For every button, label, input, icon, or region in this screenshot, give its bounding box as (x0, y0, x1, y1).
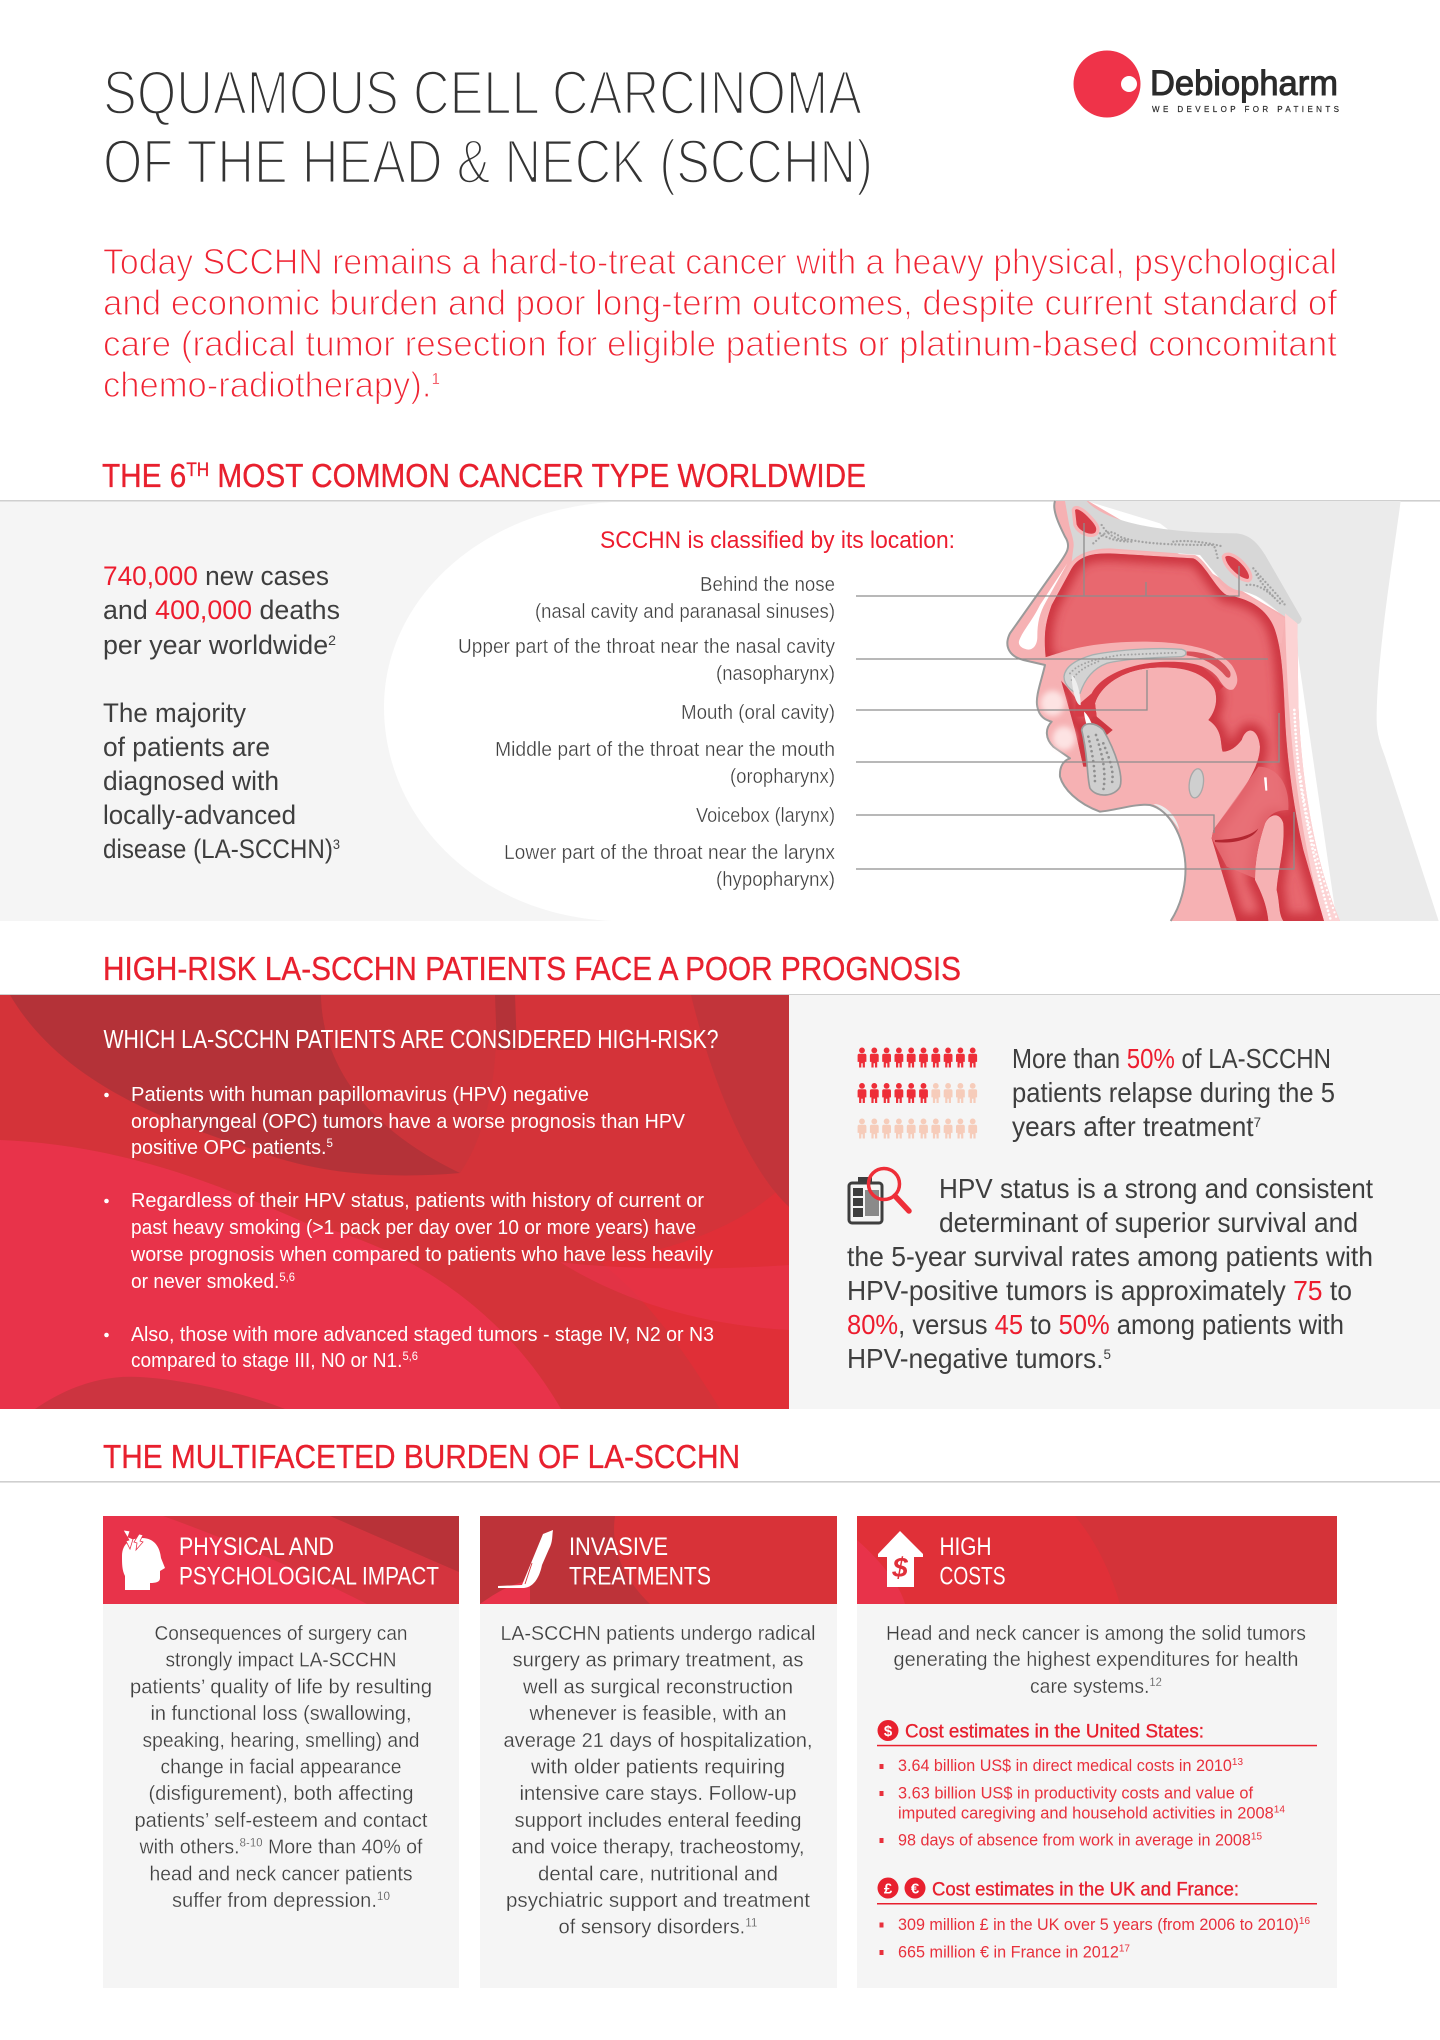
list: UK and France costs: 309 million £ in the UK over 5 years (from 2006 to 2010) (898, 1915, 1320, 1934)
bone dots (1093, 525, 1285, 605)
icon: house with dollar: $ (891, 1552, 908, 1583)
text: HPV status: the 5-year survival rates among patients with (847, 1241, 1373, 1272)
list: US costs: 15 (1251, 1830, 1262, 1842)
text: relapse: 7 (1254, 1114, 1261, 1130)
body text: patients’ self-esteem and contact (134, 1809, 428, 1832)
header text (569, 1533, 711, 1590)
palate (1030, 642, 1237, 703)
bullet: HPV negative: 5 (327, 1136, 333, 1150)
intro text: care (radical tumor resection for eligible patients or platinum-based concomitant (103, 323, 1337, 364)
larynx (1212, 767, 1288, 878)
text: HPV status: HPV-negative tumors. (847, 1343, 1114, 1374)
location labels: (hypopharynx) (716, 869, 835, 891)
header text: COSTS (940, 1562, 1006, 1590)
list: UK and France costs (880, 1915, 1310, 1961)
list: US costs: imputed caregiving and household activities in 2008 (898, 1803, 1287, 1822)
intro text: Today SCCHN remains a hard-to-treat cancer with a heavy physical, psychological (103, 241, 1337, 282)
body text: well as surgical reconstruction (522, 1675, 793, 1698)
body text: head and neck cancer patients (150, 1862, 412, 1885)
body text: generating the highest expenditures for health (894, 1648, 1298, 1671)
subheading: UK and France: £ (884, 1880, 893, 1898)
heading: 6th most common: MOST COMMON CANCER TYPE WORLDWIDE (209, 457, 866, 494)
anatomy illustration: head and neck cross-section (1007, 501, 1439, 921)
body text: surgery as primary treatment, as (512, 1649, 804, 1672)
lead text: cases and deaths: and 400,000 deaths (103, 595, 340, 625)
face outline (1007, 501, 1186, 921)
lead text: majority of patients: disease (LA-SCCHN) (103, 834, 355, 864)
header text: INVASIVE (569, 1533, 668, 1561)
text: HPV status: HPV-positive tumors is approximately 75 to (847, 1275, 1352, 1306)
body text: support includes enteral feeding (514, 1809, 802, 1832)
icon: house with dollar (878, 1531, 923, 1587)
text: HPV status: 5 (1104, 1346, 1111, 1362)
subheading: UK and France: Cost estimates in the UK and France: (932, 1878, 1239, 1900)
lead text: majority of patients: locally-advanced (103, 800, 296, 830)
nostril (1019, 563, 1067, 650)
text: HPV status (847, 1173, 1373, 1374)
location labels (458, 574, 835, 891)
intro text: 1 (431, 371, 440, 388)
tooth upper (1072, 675, 1081, 705)
icon: people row 2 (858, 1083, 977, 1103)
panel: location band (0, 500, 1440, 921)
body text: in functional loss (swallowing, (150, 1702, 412, 1725)
oral cavity dark (1075, 658, 1223, 717)
heading: high-risk: HIGH-RISK LA-SCCHN PATIENTS FACE A POOR PROGNOSIS (103, 950, 961, 987)
location labels: Middle part of the throat near the mouth (495, 739, 835, 761)
list: US costs: 3.63 billion US$ in productivity costs and value of (898, 1783, 1253, 1802)
body text: Consequences of surgery can (154, 1622, 408, 1645)
body text: average 21 days of hospitalization, (504, 1729, 812, 1752)
card header (857, 1516, 1337, 1604)
body text: 8-10 (240, 1836, 263, 1850)
body text (886, 1622, 1306, 1698)
panel: relapse and survival (789, 995, 1440, 1409)
list: US costs: 3.64 billion US$ in direct medical costs in 2010 (898, 1756, 1250, 1775)
hyoid bone (1187, 768, 1205, 799)
header text: PSYCHOLOGICAL IMPACT (179, 1562, 439, 1590)
classification heading: SCCHN is classified by its location: (600, 527, 955, 554)
palate dots (1070, 653, 1177, 680)
bullet: smoking: worse prognosis when compared to patients who have less heavily (130, 1243, 714, 1266)
body text: LA-SCCHN patients undergo radical (500, 1622, 816, 1645)
body text: change in facial appearance (160, 1756, 402, 1778)
header text: PHYSICAL AND (179, 1533, 334, 1561)
lead text: majority of patients: 3 (333, 836, 340, 852)
body text: and voice therapy, tracheostomy, (512, 1836, 804, 1859)
icon: head with lightning (122, 1530, 165, 1590)
skull bone (1065, 501, 1302, 624)
spine band (1285, 613, 1340, 921)
subheading: United States: Cost estimates in the United States: (905, 1720, 1204, 1742)
text: HPV status: HPV status is a strong and consistent (939, 1173, 1373, 1204)
cavity (1045, 553, 1324, 921)
text: HPV status: determinant of superior survival and (939, 1207, 1358, 1238)
bullet: smoking (104, 1189, 714, 1293)
bullet: advanced stage: compared to stage III, N0 or N1. (131, 1349, 423, 1372)
logo: Debiopharm (1074, 50, 1339, 118)
header text: HIGH (940, 1533, 992, 1561)
heading: 6th most common: TH (186, 460, 209, 481)
location labels: (nasopharynx) (716, 663, 835, 685)
body text: with older patients requiring (530, 1756, 785, 1778)
body text: Head and neck cancer is among the solid tumors (886, 1622, 1306, 1645)
bullet: HPV negative: Patients with human papillomavirus (HPV) negative (131, 1083, 589, 1106)
panel: which patients are high-risk (0, 995, 789, 1409)
text: relapse: years after treatment (1012, 1111, 1266, 1142)
list: US costs: 98 days of absence from work in average in 2008 (898, 1830, 1269, 1849)
bullet: advanced stage (104, 1323, 714, 1372)
subheading: United States: $ (884, 1723, 893, 1740)
frontal sinus (1073, 508, 1098, 535)
location labels: (oropharynx) (730, 766, 835, 788)
body text: care systems. (1030, 1675, 1156, 1698)
title: OF THE HEAD & NECK (SCCHN) (103, 128, 873, 197)
soft palate (1187, 651, 1231, 678)
bullet: smoking: 5,6 (279, 1270, 295, 1284)
panel: physical and psychological impact (103, 1516, 459, 1988)
subheading: UK and France: € (911, 1880, 920, 1898)
body text (500, 1622, 816, 1939)
card header (103, 1516, 459, 1604)
intro text: chemo-radiotherapy). (103, 364, 445, 405)
body text: (disfigurement), both affecting (148, 1782, 414, 1805)
bullet: smoking: past heavy smoking (>1 pack per day over 10 or more years) have (131, 1216, 696, 1239)
list: US costs (880, 1756, 1285, 1849)
body text: speaking, hearing, smelling) and (142, 1729, 420, 1752)
body text: intensive care stays. Follow-up (520, 1782, 796, 1805)
pink lining around cavity (1043, 550, 1285, 643)
list: UK and France costs: 17 (1119, 1942, 1130, 1954)
tooth lower (1084, 712, 1094, 733)
body text: whenever is feasible, with an (529, 1702, 786, 1725)
hard palate bone (1064, 649, 1186, 693)
bullet: smoking: or never smoked. (131, 1270, 289, 1293)
list: UK and France costs: 16 (1299, 1915, 1310, 1927)
flesh (1007, 501, 1340, 921)
lead text: cases and deaths: 2 (328, 632, 336, 648)
lead text: majority of patients: of patients are (103, 732, 270, 762)
bullet: advanced stage: 5,6 (402, 1349, 418, 1363)
location labels: Behind the nose (700, 574, 835, 596)
title: SQUAMOUS CELL CARCINOMA (103, 59, 863, 128)
bullet: HPV negative (104, 1083, 685, 1159)
icon: scalpel (498, 1530, 553, 1588)
lead text: cases and deaths: 740,000 new cases (103, 561, 329, 591)
upper lip highlight (1041, 691, 1065, 716)
lead text: majority of patients (103, 698, 340, 864)
mandible dots (1088, 735, 1113, 790)
icon: people row 3 (858, 1118, 977, 1138)
larynx highlight (1264, 777, 1267, 791)
neck shadow (1153, 804, 1179, 830)
body text: suffer from depression. (172, 1889, 381, 1912)
lead text: majority of patients: The majority (103, 698, 247, 728)
text: relapse: More than 50% of LA-SCCHN (1012, 1043, 1331, 1074)
body text: of sensory disorders. (558, 1916, 749, 1939)
subheading: UK and France (877, 1878, 1317, 1904)
lead text: majority of patients: diagnosed with (103, 766, 279, 796)
intro text (103, 241, 1338, 405)
card header (480, 1516, 837, 1604)
body text: More than 40% of (263, 1836, 423, 1859)
text: relapse (1012, 1043, 1335, 1142)
logo: Debiopharm: WE DEVELOP FOR PATIENTS (1152, 105, 1339, 114)
subheading: United States (877, 1720, 1317, 1746)
lead text: cases and deaths: per year worldwide (103, 630, 325, 660)
sphenoid sinus (1223, 554, 1251, 581)
body text: dental care, nutritional and (538, 1862, 778, 1885)
icon: clipboard and magnifier (849, 1168, 909, 1223)
logo: Debiopharm: Debiopharm (1150, 64, 1338, 103)
body text: 10 (377, 1889, 390, 1903)
panel heading: WHICH LA-SCCHN PATIENTS ARE CONSIDERED HIGH-RISK? (104, 1026, 718, 1054)
location labels: Mouth (oral cavity) (681, 702, 835, 724)
body text: strongly impact LA-SCCHN (166, 1649, 396, 1672)
body text: patients’ quality of life by resulting (130, 1675, 432, 1698)
spine dots (1294, 710, 1331, 920)
list: UK and France costs: 665 million € in France in 2012 (898, 1942, 1130, 1961)
text: relapse: patients relapse during the 5 (1012, 1077, 1335, 1108)
bullet: HPV negative: positive OPC patients. (131, 1136, 334, 1159)
lower lip highlight (1053, 726, 1075, 750)
panel: high costs (857, 1516, 1337, 1988)
background head silhouette (1087, 501, 1439, 921)
location labels: Upper part of the throat near the nasal cavity (458, 636, 835, 658)
panel: invasive treatments (480, 1516, 837, 1988)
header text: TREATMENTS (569, 1562, 711, 1590)
list: US costs: 13 (1232, 1756, 1243, 1768)
icon: people row 1 (858, 1048, 977, 1068)
mandible (1082, 724, 1121, 795)
location labels: Lower part of the throat near the larynx (504, 842, 835, 864)
text: HPV status: 80%, versus 45 to 50% among patients with (847, 1309, 1344, 1340)
title (103, 59, 873, 197)
bullet: advanced stage: Also, those with more advanced staged tumors - stage IV, N2 or N3 (131, 1323, 714, 1346)
lead text: cases and deaths (103, 561, 340, 660)
vocal fold (1215, 828, 1258, 842)
heading: 6th most common: THE 6 (102, 457, 196, 494)
body text (130, 1622, 432, 1912)
body text: 11 (745, 1916, 758, 1930)
bullet: HPV negative: oropharyngeal (OPC) tumors have a worse prognosis than HPV (131, 1110, 685, 1133)
body text: 12 (1149, 1675, 1162, 1689)
body text: psychiatric support and treatment (506, 1889, 810, 1912)
location labels: Voicebox (larynx) (696, 805, 835, 827)
heading: multifaceted burden: THE MULTIFACETED BURDEN OF LA-SCCHN (103, 1438, 740, 1475)
body text: with others. (140, 1836, 244, 1859)
header text (940, 1533, 1006, 1590)
list: US costs: 14 (1274, 1803, 1285, 1815)
intro text: and economic burden and poor long-term outcomes, despite current standard of (103, 282, 1338, 323)
bullet: smoking: Regardless of their HPV status, patients with history of current or (131, 1189, 704, 1212)
leader lines (856, 523, 1294, 869)
location labels: (nasal cavity and paranasal sinuses) (535, 601, 835, 623)
header text (179, 1533, 439, 1590)
